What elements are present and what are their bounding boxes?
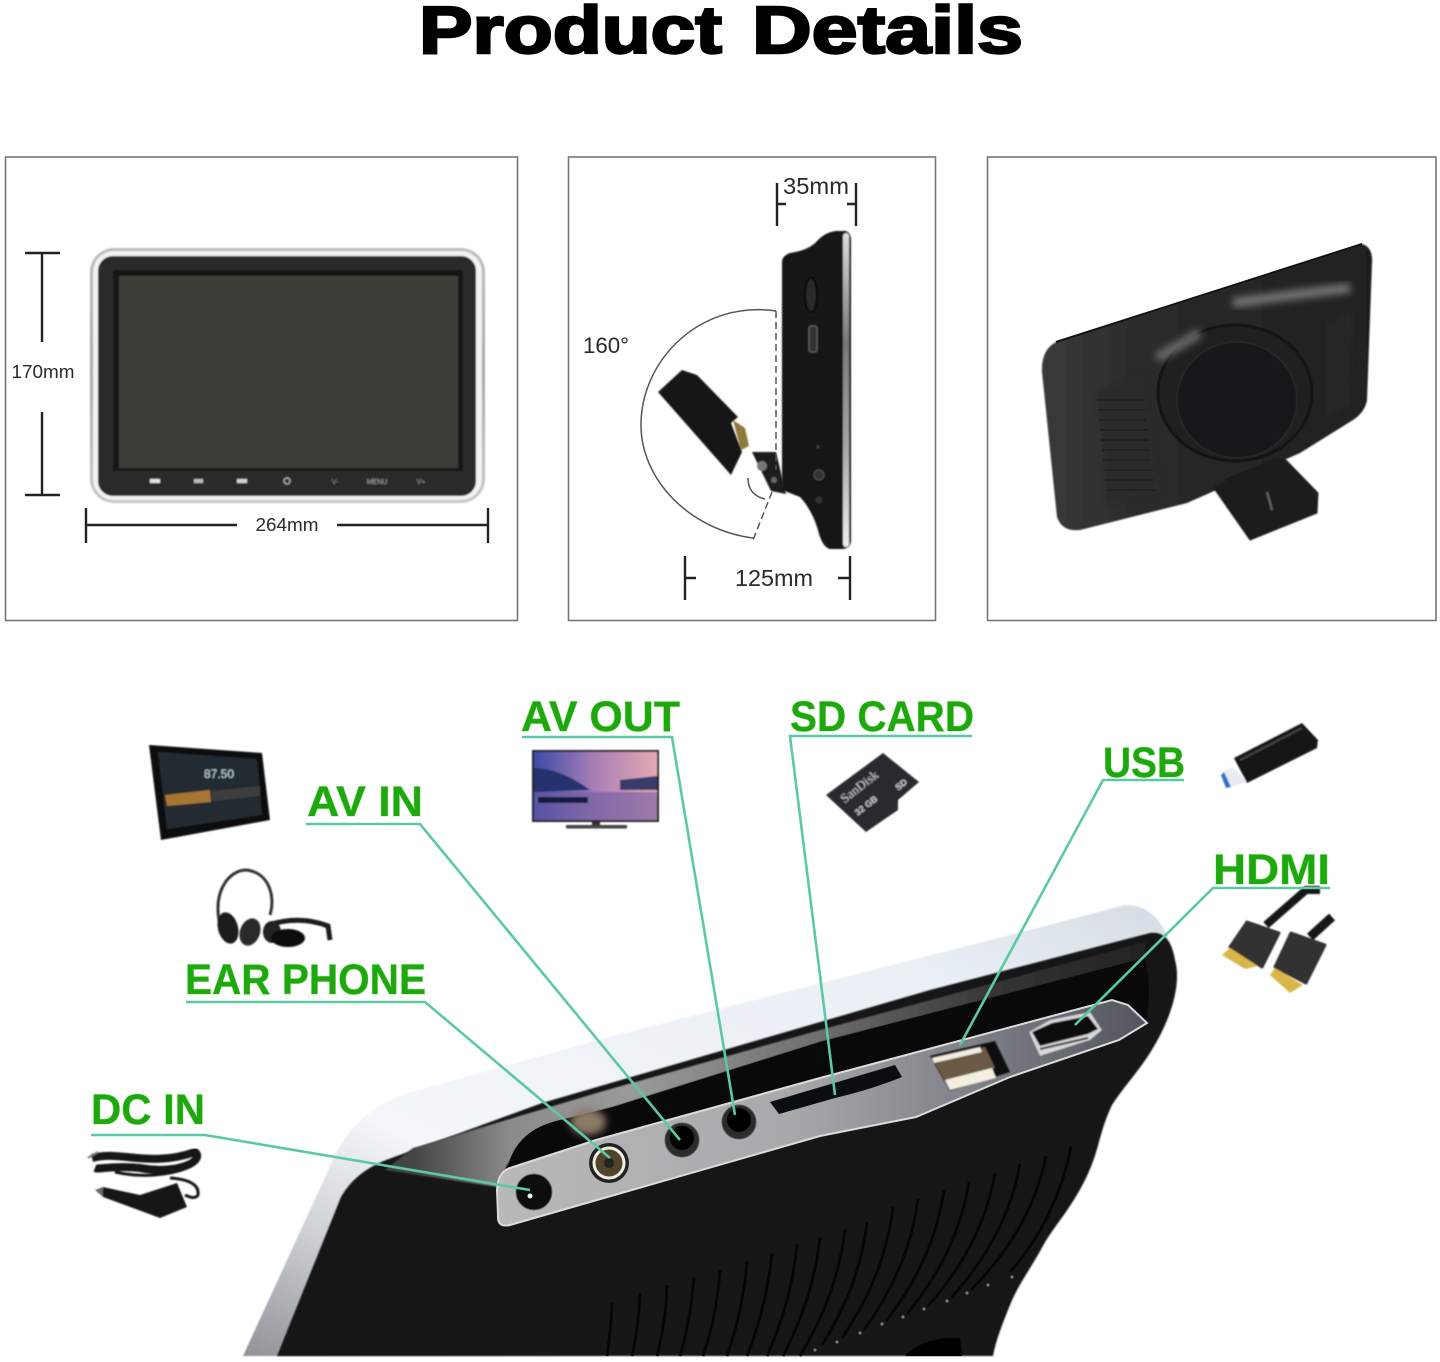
bottom recess <box>905 1338 962 1356</box>
icon: tv <box>532 750 659 828</box>
panel: rear view <box>988 157 1436 620</box>
port: av in <box>665 1123 699 1157</box>
mount bracket <box>658 370 786 494</box>
port: usb <box>930 1041 1010 1091</box>
callout: hdmi: HDMI <box>1213 846 1330 894</box>
dark recess <box>502 958 1149 1175</box>
icon: hdmi cables <box>1222 890 1332 993</box>
vent slots <box>607 1147 1071 1356</box>
silver frame <box>243 905 1172 1356</box>
callout: usb: USB <box>1103 739 1185 787</box>
port: ear phone <box>589 1143 629 1183</box>
vent dots <box>813 1275 1014 1352</box>
recess reflection <box>570 1109 606 1135</box>
depth dimension 125mm: 125mm <box>735 565 813 591</box>
rotation arc 160 degrees <box>641 310 776 540</box>
height dimension 170mm <box>12 253 74 495</box>
icon: car stereo <box>149 745 270 840</box>
callout: usb <box>960 739 1185 1045</box>
panel: front dimensions <box>6 157 518 620</box>
width dimension 264mm: 264mm <box>256 515 318 535</box>
monitor rear <box>1042 244 1372 530</box>
callout: sd card <box>790 693 974 1095</box>
icon: microsd card <box>826 753 919 832</box>
callout: sd card: SD CARD <box>790 693 974 741</box>
label 160 degrees: 160° <box>583 333 629 358</box>
port bar <box>497 1000 1147 1226</box>
depth dimension 35mm <box>777 173 856 226</box>
icon: microsd card: SanDisk <box>837 767 882 806</box>
callout: dc in: DC IN <box>91 1086 205 1134</box>
icon: usb dongle <box>1221 723 1318 789</box>
lip reflection strip <box>385 942 1145 1187</box>
icon: dc car charger <box>88 1152 198 1218</box>
icon: microsd card: SD <box>893 777 910 792</box>
callout: av out: AV OUT <box>521 693 680 741</box>
callout: ear phone <box>185 956 610 1158</box>
monitor front view: V- <box>332 479 339 486</box>
callout: hdmi <box>1075 846 1330 1025</box>
monitor ports close-up <box>243 905 1177 1356</box>
black rear body <box>277 933 1177 1356</box>
depth dimension 125mm <box>685 556 850 600</box>
monitor front view: V+ <box>417 479 425 486</box>
monitor front view: MENU <box>367 479 387 486</box>
title <box>419 0 1023 68</box>
monitor front view <box>90 248 485 503</box>
monitor side profile <box>782 231 851 549</box>
depth dimension 35mm: 35mm <box>783 173 849 199</box>
port: dc in <box>516 1174 552 1210</box>
callout: dc in <box>91 1086 530 1190</box>
callout: av in: AV IN <box>307 778 423 826</box>
width dimension 264mm <box>86 508 488 543</box>
callout: av out <box>521 693 735 1115</box>
rear mount bracket <box>1213 457 1318 540</box>
port: hdmi <box>1029 1012 1102 1056</box>
panel: side view <box>568 157 936 620</box>
icon: microsd card: 32 GB <box>853 793 880 818</box>
icon: headphones <box>214 870 330 949</box>
height dimension 170mm: 170mm <box>12 362 74 382</box>
callout: av in <box>306 778 680 1140</box>
port: av out <box>722 1105 756 1139</box>
port: sd slot <box>770 1065 902 1114</box>
callout: ear phone: EAR PHONE <box>185 956 426 1004</box>
icon: car stereo: 87.50 <box>204 767 234 781</box>
